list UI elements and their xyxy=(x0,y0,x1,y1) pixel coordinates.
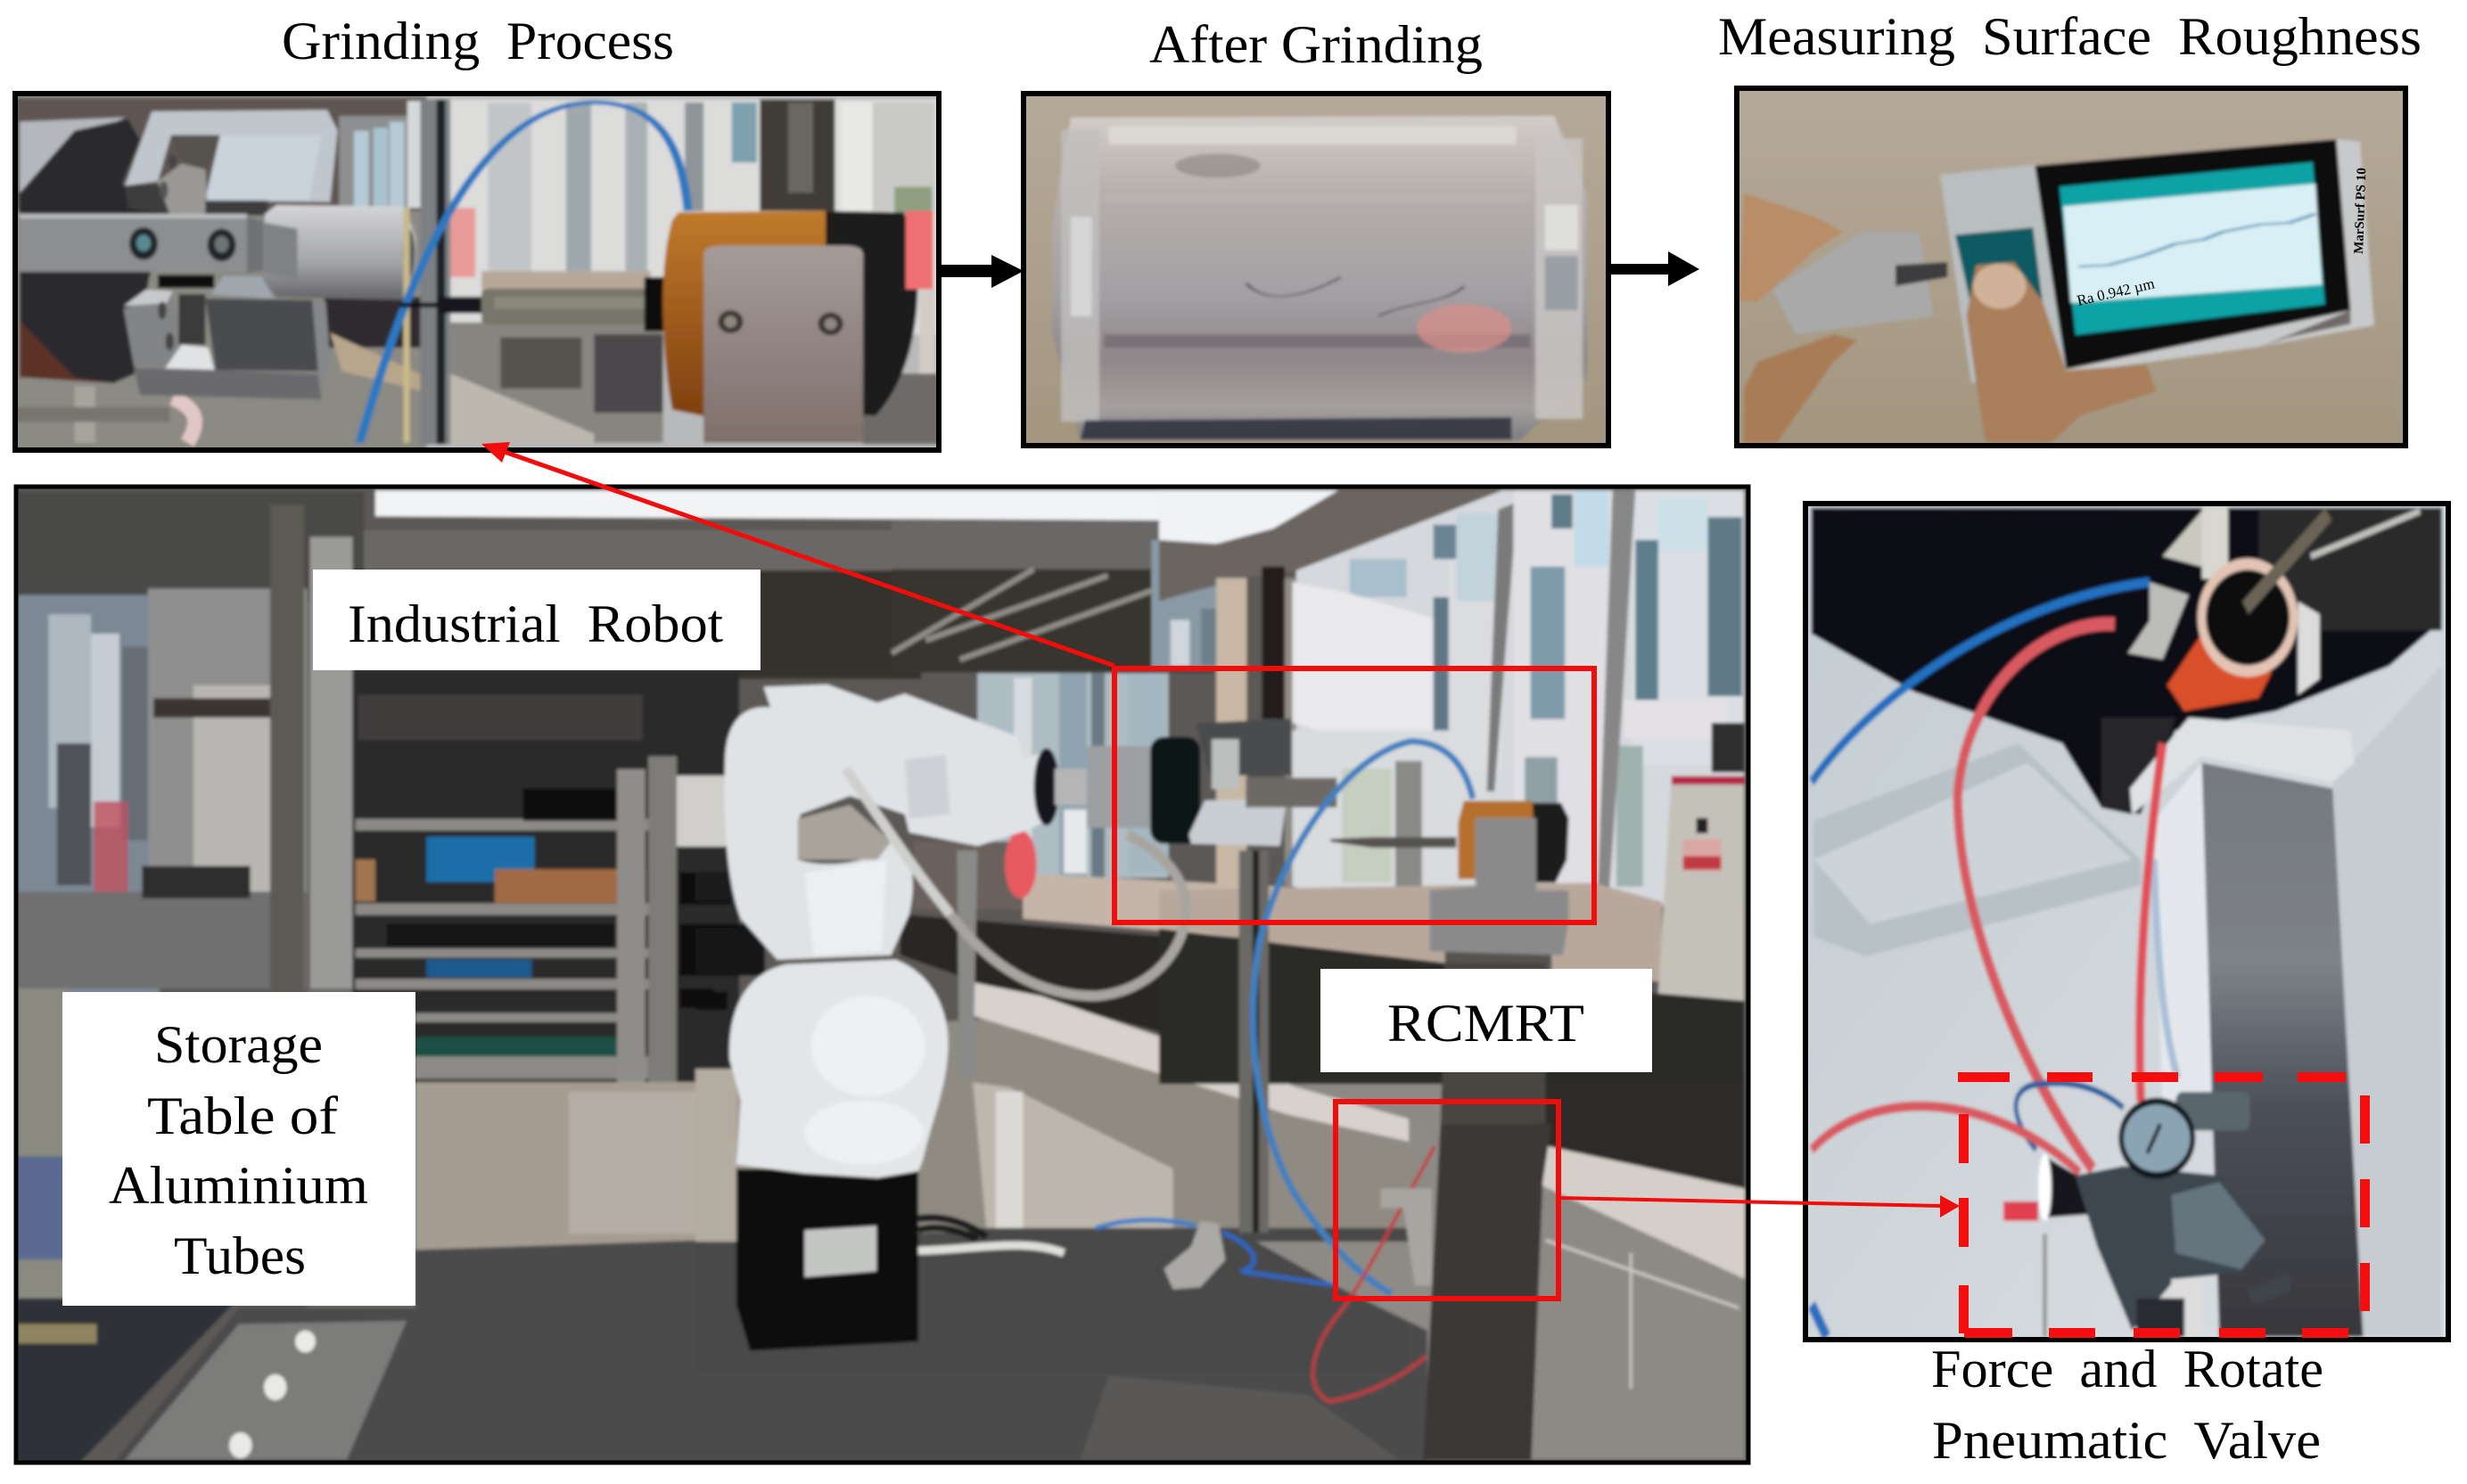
caption: Force and Rotate Pneumatic Valve xyxy=(1931,1340,2323,1470)
arrow: after grinding to measuring xyxy=(1608,251,1699,286)
highlight box: end effector and RCMRT xyxy=(1114,668,1594,922)
arrow: valve box to pneumatic valve xyxy=(1558,1195,1960,1218)
text: roughness reading: Ra 0.942 µm xyxy=(2076,275,2156,309)
label: Industrial Robot xyxy=(313,570,761,670)
label: RCMRT xyxy=(1320,969,1652,1072)
panel: robot cell main photo xyxy=(12,482,1757,1469)
label: Storage Table of Aluminium Tubes: Tubes xyxy=(174,1226,306,1285)
label: Storage Table of Aluminium Tubes: Storage xyxy=(154,1015,323,1074)
arrow: highlight box to grinding process xyxy=(481,442,1114,666)
label: Storage Table of Aluminium Tubes xyxy=(62,992,415,1306)
label: Industrial Robot: Industrial Robot xyxy=(348,594,723,653)
panel: measuring surface roughness photo xyxy=(1737,88,2410,447)
label: RCMRT: RCMRT xyxy=(1387,994,1584,1053)
panel: aluminium tube after grinding photo xyxy=(1024,94,1611,447)
label: Storage Table of Aluminium Tubes: Table of xyxy=(147,1086,338,1145)
arrow: grinding to after grinding xyxy=(939,255,1024,288)
robot background: windows, railing, floor xyxy=(695,673,1423,1242)
heading: After Grinding: After Grinding xyxy=(1149,15,1483,74)
background: right windows and cabinet xyxy=(1151,490,1744,1084)
dashed highlight box: pneumatic valve xyxy=(1958,1072,2370,1338)
panel: grinding process photo xyxy=(15,89,942,455)
caption: Force and Rotate Pneumatic Valve: Pneumatic Valve xyxy=(1932,1411,2321,1470)
label: Storage Table of Aluminium Tubes: Aluminium xyxy=(109,1156,368,1215)
RCMRT stand xyxy=(1330,801,1568,974)
caption: Force and Rotate Pneumatic Valve: Force and Rotate xyxy=(1931,1340,2323,1398)
heading: Measuring Surface Roughness: Measuring Surface Roughness xyxy=(1718,7,2422,66)
panel: force and rotate pneumatic valve photo xyxy=(1805,504,2449,1342)
robot and end effector xyxy=(695,685,1473,1373)
heading: Grinding Process: Grinding Process xyxy=(282,12,674,70)
text: device brand: MarSurf PS 10 xyxy=(2352,168,2369,254)
highlight box: valve location xyxy=(1336,1102,1558,1299)
